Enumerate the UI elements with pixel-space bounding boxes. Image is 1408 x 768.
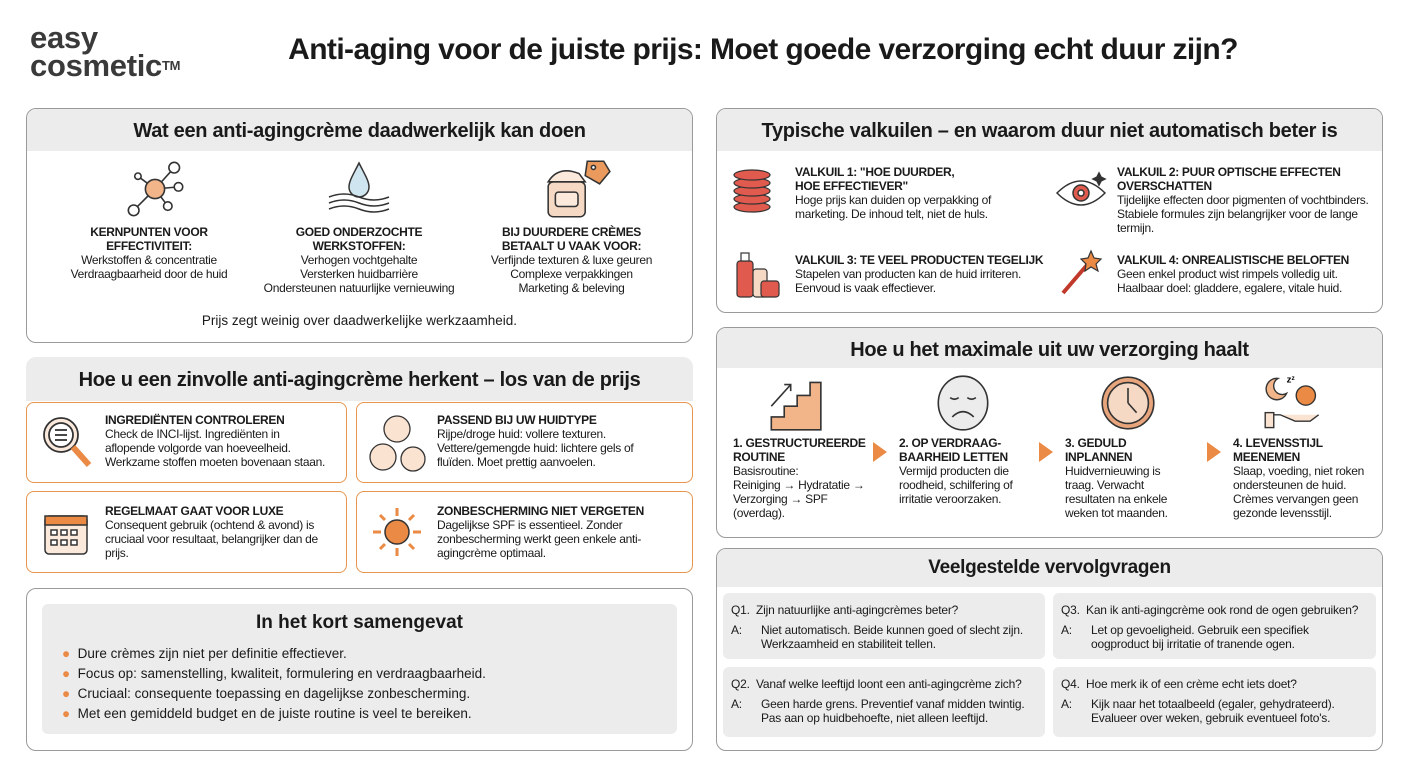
- icon: calendar: [44, 515, 88, 555]
- heading: Typische valkuilen – en waarom duur niet automatisch beter is: [762, 120, 1337, 142]
- text: INGREDIËNTEN CONTROLEREN: [105, 413, 284, 427]
- faq q4: Kijk naar het totaalbeeld (egaler, gehydrateerd).: [1091, 697, 1335, 711]
- text: kernpunten: KERNPUNTEN VOOR: [90, 225, 208, 239]
- heading: Hoe u het maximale uit uw verzorging haalt: [850, 339, 1249, 361]
- faq q4: A:: [1061, 697, 1072, 711]
- text: duurdere cremes: BIJ DUURDERE CRÈMES: [502, 225, 641, 239]
- text: werkstoffen: Versterken huidbarrière: [300, 267, 418, 281]
- arrow: [873, 442, 887, 462]
- icon: lifestyle: [1264, 375, 1319, 428]
- text: kernpunten: Werkstoffen & concentratie: [81, 253, 217, 267]
- step 4: Slaap, voeding, niet roken ondersteunen de huid. Crèmes vervangen geen gezonde levensstijl.: [1233, 464, 1364, 520]
- faq q1: Niet automatisch. Beide kunnen goed of slecht zijn.: [761, 623, 1023, 637]
- text: Dagelijkse SPF is essentieel. Zonder zonbescherming werkt geen enkele anti-agingcrème optimaal.: [437, 518, 641, 560]
- faq q4: [1053, 667, 1376, 737]
- faq q2: Pas aan op huidbehoefte, niet alleen leeftijd.: [761, 711, 988, 725]
- logo: [30, 20, 180, 83]
- bullet list: ● Dure crèmes zijn niet per definitie effectiever.: [62, 646, 347, 661]
- panel: how to recognize: [26, 357, 693, 582]
- text: valkuil 1: HOE EFFECTIEVER": [795, 179, 908, 193]
- heading: Wat een anti-agingcrème daadwerkelijk kan doen: [133, 120, 586, 142]
- card: ingredienten: [26, 402, 347, 483]
- step 2: [899, 436, 1013, 506]
- step 2: BAARHEID LETTEN: [899, 450, 1008, 464]
- text: Check de INCI-lijst. Ingrediënten in aflopende volgorde van hoeveelheid. Werkzame stoffen moeten bovenaan staan.: [105, 427, 325, 469]
- text: werkstoffen: WERKSTOFFEN:: [313, 239, 405, 253]
- text: duurdere cremes: Verfijnde texturen & luxe geuren: [491, 253, 652, 267]
- step 1: 1. GESTRUCTUREERDE ROUTINE: [733, 436, 866, 464]
- faq q4: Evalueer over weken, gebruik eventueel foto's.: [1091, 711, 1330, 725]
- text: Vettere/gemengde huid: lichtere gels of fluïden. Moet prettig aanvoelen.: [437, 441, 633, 469]
- faq q3: Let op gevoeligheid. Gebruik een specifiek: [1091, 623, 1309, 637]
- card: huidtype: [356, 402, 693, 483]
- text: valkuil 1: [795, 165, 992, 221]
- text: REGELMAAT GAAT VOOR LUXE: [105, 504, 283, 518]
- bullet list: [62, 646, 486, 721]
- faq q1: Q1. Zijn natuurlijke anti-agingcrèmes beter?: [731, 603, 958, 617]
- heading: [717, 549, 1382, 587]
- text: duurdere cremes: [491, 225, 652, 295]
- text: duurdere cremes: Complexe verpakkingen: [510, 267, 633, 281]
- panel: summary: [26, 588, 693, 751]
- step 1: [733, 436, 866, 520]
- panel: what cream can do: [26, 108, 693, 343]
- text: duurdere cremes: BETAALT U VAAK VOOR:: [502, 239, 641, 253]
- icon: clock: [1101, 376, 1155, 430]
- text: werkstoffen: [264, 225, 454, 295]
- text: ZONBESCHERMING NIET VERGETEN: [437, 504, 644, 518]
- icon: faces: [369, 415, 426, 472]
- faq q2: Q2. Vanaf welke leeftijd loont een anti-agingcrème zich?: [731, 677, 1022, 691]
- text: werkstoffen: GOED ONDERZOCHTE: [296, 225, 422, 239]
- arrow: [1207, 442, 1221, 462]
- icon: stairs: [770, 382, 822, 431]
- step 3: Huidvernieuwing is traag. Verwacht resultaten na enkele weken tot maanden.: [1065, 464, 1168, 520]
- step 4: MEENEMEN: [1233, 450, 1300, 464]
- text: kernpunten: Verdraagbaarheid door de huid: [71, 267, 227, 281]
- icon: magnifier: [43, 417, 92, 467]
- icon: bottles: [736, 252, 780, 298]
- faq q1: [723, 593, 1045, 659]
- faq q2: [723, 667, 1045, 737]
- step 3: [1065, 436, 1168, 520]
- step 2: 2. OP VERDRAAG-: [899, 436, 1001, 450]
- icon: lifestyle: zᶻ: [1287, 375, 1295, 386]
- heading: [717, 328, 1382, 368]
- text: Consequent gebruik (ochtend & avond) is cruciaal voor resultaat, belangrijker dan de prijs.: [105, 518, 318, 560]
- text: Rijpe/droge huid: vollere texturen.: [437, 427, 606, 441]
- heading: [26, 357, 693, 401]
- faq q3: oogproduct bij irritatie of tranende ogen.: [1091, 637, 1295, 651]
- heading: In het kort samengevat: [256, 612, 463, 633]
- heading: Veelgestelde vervolgvragen: [928, 557, 1171, 578]
- step 4: [1233, 436, 1364, 520]
- step 3: 3. GEDULD: [1065, 436, 1126, 450]
- step 2: Vermijd producten die roodheid, schilfering of irritatie veroorzaken.: [899, 464, 1013, 506]
- icon: sad face: [938, 375, 988, 431]
- text: valkuil 3: VALKUIL 3: TE VEEL PRODUCTEN TEGELIJK: [795, 253, 1043, 267]
- icon: magic wand: [1062, 250, 1102, 294]
- panel: valkuilen: [716, 108, 1383, 313]
- faq q1: A:: [731, 623, 742, 637]
- heading: [717, 109, 1382, 151]
- card: zonbescherming: [356, 491, 693, 573]
- text: PASSEND BIJ UW HUIDTYPE: [437, 413, 597, 427]
- step 1: Reiniging → Hydratatie → Verzorging → SPF (overdag).: [733, 478, 865, 520]
- text: werkstoffen: Verhogen vochtgehalte: [301, 253, 417, 267]
- heading: Hoe u een zinvolle anti-agingcrème herkent – los van de prijs: [79, 369, 640, 391]
- inner box: [42, 604, 677, 734]
- text: valkuil 4: [1117, 253, 1349, 295]
- step 1: Basisroutine:: [733, 464, 798, 478]
- text: kernpunten: [70, 225, 227, 281]
- text: valkuil 4: Geen enkel product wist rimpels volledig uit. Haalbaar doel: gladdere, egalere, vitale huid.: [1117, 267, 1342, 295]
- text: valkuil 1: Hoge prijs kan duiden op verpakking of marketing. De inhoud telt, niet de huls.: [795, 193, 991, 221]
- text: valkuil 2: VALKUIL 2: PUUR OPTISCHE EFFECTEN: [1117, 165, 1341, 179]
- card: regelmaat: [26, 491, 347, 573]
- text: valkuil 2: OVERSCHATTEN: [1117, 179, 1212, 193]
- faq q3: A:: [1061, 623, 1072, 637]
- text: valkuil 2: [1117, 165, 1369, 235]
- text: [437, 413, 634, 469]
- faq q2: A:: [731, 697, 742, 711]
- text: valkuil 4: VALKUIL 4: ONREALISTISCHE BELOFTEN: [1117, 253, 1349, 267]
- panel: FAQ: [716, 548, 1383, 751]
- faq q2: Geen harde grens. Preventief vanaf midden twintig.: [761, 697, 1024, 711]
- text: valkuil 1: VALKUIL 1: "HOE DUURDER,: [795, 165, 954, 179]
- text: werkstoffen: Ondersteunen natuurlijke vernieuwing: [264, 281, 454, 295]
- icon: eye: [1056, 172, 1106, 206]
- text: valkuil 2: Tijdelijke effecten door pigmenten of vochtbinders. Stabiele formules zijn belangrijker voor de lange termijn.: [1117, 193, 1369, 235]
- icon: molecule: [128, 162, 184, 216]
- text: summary line: Prijs zegt weinig over daadwerkelijke werkzaamheid.: [202, 313, 517, 328]
- icon: cream jar with tag: [546, 160, 611, 218]
- text: valkuil 3: [795, 253, 1044, 295]
- faq q3: Q3. Kan ik anti-agingcrème ook rond de ogen gebruiken?: [1061, 603, 1358, 617]
- text: duurdere cremes: Marketing & beleving: [518, 281, 625, 295]
- bullet list: ● Met een gemiddeld budget en de juiste routine is veel te bereiken.: [62, 706, 472, 721]
- step 4: 4. LEVENSSTIJL: [1233, 436, 1323, 450]
- bullet list: ● Cruciaal: consequente toepassing en dagelijkse zonbescherming.: [62, 686, 470, 701]
- logo: easy: [30, 20, 98, 55]
- logo: cosmeticTM: [30, 48, 180, 83]
- title: Anti-aging voor de juiste prijs: Moet goede verzorging echt duur zijn?: [288, 33, 1238, 66]
- text: kernpunten: EFFECTIVITEIT:: [106, 239, 192, 253]
- heading: [27, 109, 692, 151]
- faq q4: Q4. Hoe merk ik of een crème echt iets doet?: [1061, 677, 1297, 691]
- icon: water drop skin: [328, 162, 390, 213]
- faq q3: [1053, 593, 1376, 659]
- icon: sun: [373, 508, 421, 556]
- faq q1: Werkzaamheid en stabiliteit tellen.: [761, 637, 936, 651]
- text: valkuil 3: Stapelen van producten kan de huid irriteren. Eenvoud is vaak effectiever.: [795, 267, 1021, 295]
- bullet list: ● Focus op: samenstelling, kwaliteit, formulering en verdraagbaarheid.: [62, 666, 486, 681]
- arrow: [1039, 442, 1053, 462]
- icon: coins: [733, 169, 771, 213]
- step 3: INPLANNEN: [1065, 450, 1132, 464]
- panel: maximaal uit verzorging: [716, 327, 1383, 538]
